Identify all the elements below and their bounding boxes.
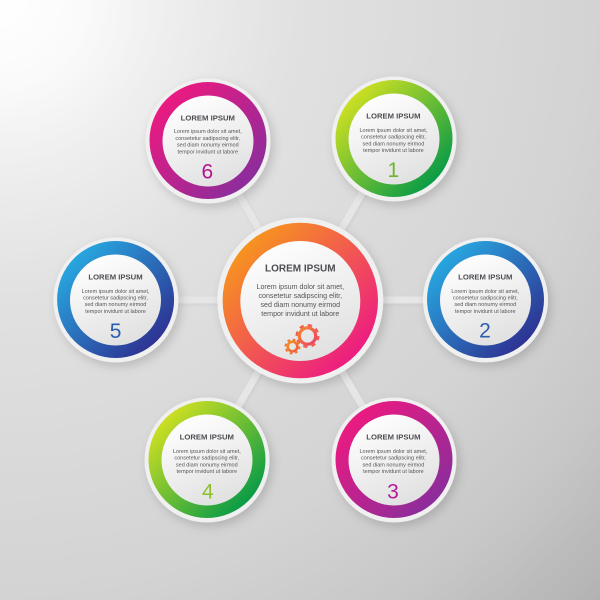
panel: step 2: 2 bbox=[479, 320, 491, 342]
hub text: tempor invidunt ut labore bbox=[261, 310, 339, 318]
panel: step 3: LOREM IPSUM bbox=[366, 433, 421, 442]
connector spokes bbox=[116, 139, 485, 460]
panel: step 2: LOREM IPSUM bbox=[458, 272, 512, 281]
panel: step 3: consetetur sadipscing elitr, bbox=[361, 456, 426, 462]
panel: step 4: Lorem ipsum dolor sit amet, bbox=[173, 449, 241, 455]
panel: step 1: tempor invidunt ut labore bbox=[363, 148, 424, 154]
panel: step 1: 1 bbox=[388, 159, 399, 182]
panel: step 3 bbox=[332, 398, 456, 522]
panel: step 4: LOREM IPSUM bbox=[180, 433, 234, 442]
panel: step 4 bbox=[144, 398, 270, 522]
panel: step 2: Lorem ipsum dolor sit amet, bbox=[451, 289, 520, 295]
panel: step 5: LOREM IPSUM bbox=[88, 272, 143, 281]
panel: step 2 bbox=[423, 238, 548, 362]
panel: step 2: consetetur sadipscing elitr, bbox=[453, 295, 518, 301]
panel: step 4: consetetur sadipscing elitr, bbox=[174, 456, 240, 462]
panel: step 3: sed diam nonumy eirmod bbox=[363, 462, 424, 468]
panel: step 1: consetetur sadipscing elitr, bbox=[361, 135, 426, 141]
panel: step 5: consetetur sadipscing elitr, bbox=[83, 295, 148, 301]
panel: step 2: tempor invidunt ut labore bbox=[455, 309, 516, 315]
panel: step 1 bbox=[332, 76, 456, 202]
panel: step 1: Lorem ipsum dolor sit amet, bbox=[359, 128, 428, 134]
panel: step 4: tempor invidunt ut labore bbox=[177, 469, 237, 475]
panel: step 5: Lorem ipsum dolor sit amet, bbox=[82, 289, 150, 295]
panel: step 6: tempor invidunt ut labore bbox=[178, 149, 238, 155]
panel: step 1: sed diam nonumy eirmod bbox=[363, 141, 424, 147]
panel: step 5: tempor invidunt ut labore bbox=[85, 309, 146, 315]
panel: step 5 bbox=[53, 238, 178, 362]
hub text: sed diam nonumy eirmod bbox=[260, 301, 340, 309]
panel: step 4: 4 bbox=[202, 481, 214, 504]
panel: step 5: sed diam nonumy eirmod bbox=[85, 302, 146, 308]
panel: step 3: tempor invidunt ut labore bbox=[363, 469, 424, 475]
panel: step 6: Lorem ipsum dolor sit amet, bbox=[174, 129, 242, 135]
panel: step 5: 5 bbox=[110, 320, 121, 343]
panel: step 2: sed diam nonumy eirmod bbox=[454, 302, 516, 308]
panel: step 3: 3 bbox=[387, 481, 399, 504]
panel: step 3: Lorem ipsum dolor sit amet, bbox=[359, 449, 428, 455]
panel: step 1: LOREM IPSUM bbox=[366, 112, 421, 121]
panel: step 6: consetetur sadipscing elitr, bbox=[175, 136, 241, 142]
panel: step 6 bbox=[146, 78, 270, 204]
panel: step 6: LOREM IPSUM bbox=[181, 114, 235, 122]
panel: step 4: sed diam nonumy eirmod bbox=[176, 462, 238, 468]
panel: step 6: 6 bbox=[202, 160, 213, 183]
panel: step 6: sed diam nonumy eirmod bbox=[177, 143, 239, 149]
hub text bbox=[257, 283, 344, 318]
hub text: Lorem ipsum dolor sit amet, bbox=[257, 283, 344, 291]
icon: gears bbox=[286, 325, 318, 353]
panel: central hub bbox=[217, 218, 383, 384]
hub heading: LOREM IPSUM bbox=[265, 264, 336, 275]
hub text: consetetur sadipscing elitr, bbox=[259, 292, 342, 300]
